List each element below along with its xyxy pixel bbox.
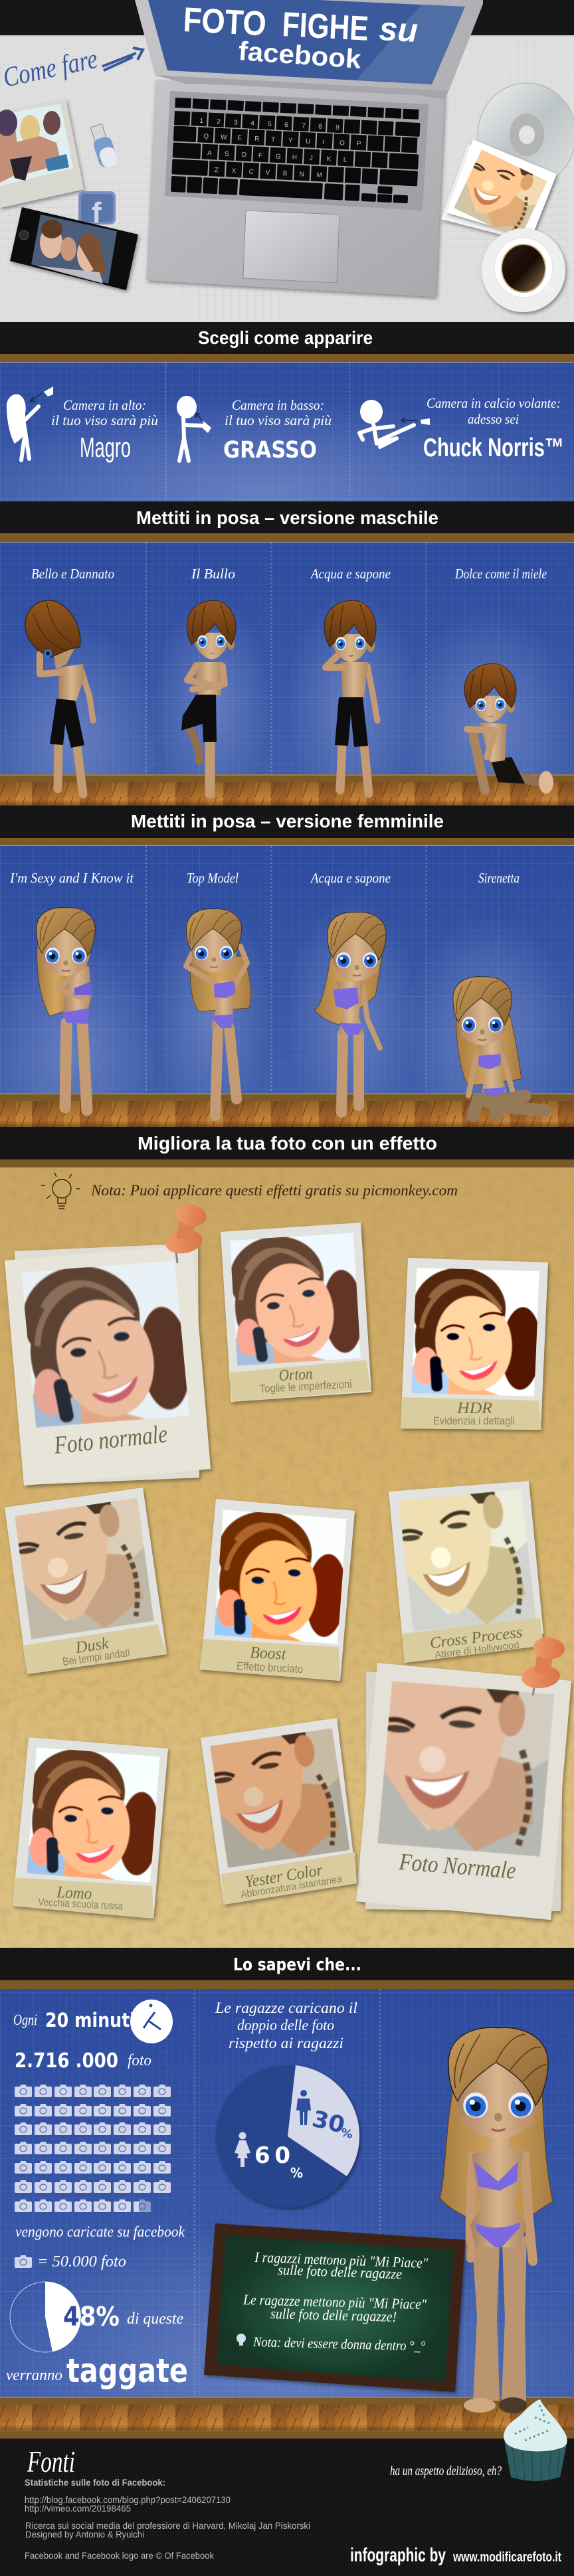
polaroid: foto normale woman: Foto normale — [52, 1420, 169, 1460]
panel: male poses — [0, 543, 574, 850]
polaroid: hdr: Evidenzia i dettagli — [433, 1415, 515, 1427]
title: FOTO — [182, 1, 267, 44]
label: il bullo: Il Bullo — [191, 566, 235, 582]
text: board lines: sulle foto delle ragazze! — [270, 2305, 397, 2325]
chart: 48 percent tagged pie: 48% — [63, 2302, 120, 2332]
icon: cupcake — [504, 2399, 567, 2482]
text: camera in basso: GRASSO — [223, 437, 317, 464]
heading: fonti: Fonti — [27, 2445, 75, 2478]
section heading: migliora la tua foto — [0, 1127, 574, 1167]
section heading: scegli come apparire — [0, 322, 574, 363]
icon: smartphone — [10, 207, 138, 290]
floor — [0, 2397, 574, 2439]
text: sources: http://vimeo.com/20198465 — [25, 2503, 131, 2514]
icon: facebook doodle: f — [92, 197, 102, 229]
panel: header desk — [0, 0, 574, 322]
polaroid: dusk: Dusk — [74, 1634, 110, 1657]
label: bello e dannato: Bello e Dannato — [31, 566, 114, 582]
figure: big girl — [440, 2027, 553, 2401]
text: ragazze doppio — [215, 2000, 357, 2051]
chart: 48 percent tagged pie: di queste — [127, 2310, 183, 2328]
polaroid: hdr: HDR — [456, 1400, 492, 1417]
text: board lines — [242, 2249, 429, 2354]
text: 2.716.000 foto: 2.716 .000 — [15, 2049, 118, 2073]
section heading: versione femminile: Mettiti in posa – versione femminile — [131, 811, 444, 831]
label: come fare: Come fare — [1, 44, 100, 94]
keyboard: ASDFGHJKL — [207, 149, 347, 164]
polaroid: boost: Boost — [250, 1644, 287, 1664]
label: 60 percent: % — [290, 2165, 303, 2181]
figure: girl i'm sexy — [37, 908, 95, 1110]
section heading: versione femminile — [0, 806, 574, 846]
title: FIGHE — [281, 5, 369, 48]
text: camera in alto: Camera in alto: — [63, 397, 146, 413]
text: camera in alto: Magro — [80, 432, 131, 463]
text: ogni 20 minuti: 20 minuti — [45, 2009, 136, 2031]
title: su — [378, 10, 419, 49]
icon: male — [296, 2090, 311, 2125]
icon: boy low camera — [177, 396, 211, 461]
credit: infographic by — [350, 2545, 561, 2566]
text: camera in calcio volante: Camera in calcio volante: — [427, 395, 561, 411]
figure: girl top model — [186, 909, 251, 1116]
text: camera in calcio volante: adesso sei — [468, 411, 519, 427]
label: dolce come il miele: Dolce come il miele — [454, 566, 547, 582]
figure: girl sirenetta — [453, 977, 545, 1116]
credit: infographic by: infographic by — [350, 2545, 446, 2566]
text: sources: Designed by Antonio & Ryuichi — [25, 2529, 144, 2539]
label: 30 percent: 30 — [310, 2106, 347, 2139]
text: camera in alto — [51, 397, 158, 463]
keyboard: ZXCVBNM — [214, 167, 322, 179]
photo: man stack — [441, 139, 557, 241]
floor — [0, 1093, 574, 1127]
icon: push pin — [163, 1202, 208, 1263]
polaroid: foto normale man — [356, 1663, 571, 1920]
icon: facebook doodle — [78, 191, 116, 229]
chart: cameras pictogram — [15, 2085, 171, 2212]
keyboard — [171, 102, 421, 204]
polaroid: orton: Toglie le imperfezioni — [259, 1378, 352, 1395]
text: verranno taggate — [6, 2352, 188, 2390]
label: i'm sexy and i know it: I'm Sexy and I Know it — [9, 870, 134, 886]
polaroid: lomo: Vecchia scuola russa — [38, 1897, 124, 1913]
label: 30 percent: % — [339, 2126, 354, 2142]
legend: camera equals 50000: = 50.000 foto — [37, 2253, 126, 2271]
chart: 48 percent tagged pie: 48% — [63, 2302, 120, 2332]
chart: 48 percent tagged pie — [10, 2282, 183, 2352]
text: ogni 20 minuti — [13, 2009, 136, 2031]
polaroid: lomo: Lomo — [56, 1883, 92, 1903]
polaroid: lomo — [13, 1737, 168, 1919]
figure: big girl feet — [464, 2397, 527, 2413]
polaroid: dusk — [5, 1488, 167, 1674]
chart: gender pie — [216, 2065, 359, 2207]
keyboard: 123456789 — [199, 118, 339, 131]
text: board lines: Le ragazze mettono più "Mi Piace" — [242, 2291, 427, 2312]
text: ragazze doppio: Le ragazze caricano il — [215, 2000, 357, 2016]
section heading: migliora la tua foto: Migliora la tua foto con un effetto — [138, 1133, 437, 1154]
label: 60 percent — [254, 2142, 303, 2181]
figure: boy bello e dannato — [25, 600, 93, 794]
icon: light bulb — [41, 1173, 80, 1209]
text: vengono caricate: vengono caricate su facebook — [15, 2223, 185, 2240]
arrow: come fare — [102, 48, 143, 70]
polaroid: cross process: Attore di Hollywood — [434, 1639, 520, 1661]
photo: friends — [0, 99, 84, 208]
polaroid: yester color: Abbronzatura istantanea — [240, 1873, 343, 1901]
icon: clock — [130, 2000, 173, 2043]
text: ogni 20 minuti: Ogni — [13, 2012, 37, 2028]
polaroid: orton — [221, 1223, 371, 1402]
text: camera in alto: il tuo viso sarà più — [51, 412, 158, 428]
title — [182, 1, 419, 74]
polaroid: cross process — [389, 1481, 543, 1663]
section heading: lo sapevi che — [0, 1948, 574, 1989]
polaroid: boost — [199, 1499, 355, 1681]
note: picmonkey: Nota: Puoi applicare questi effetti gratis su picmonkey.com — [90, 1182, 458, 1199]
text: board lines: I ragazzi mettono più "Mi Piace" — [254, 2249, 429, 2271]
text: verranno taggate: verranno — [6, 2367, 62, 2384]
floor — [0, 774, 574, 806]
polaroid: yester color — [201, 1718, 357, 1905]
figure: girl acqua e sapone — [314, 912, 386, 1112]
text: 2.716.000 foto: foto — [128, 2052, 151, 2069]
icon: small bulb — [237, 2334, 246, 2346]
section heading: versione maschile: Mettiti in posa – versione maschile — [136, 507, 438, 528]
polaroid: cross process: Cross Process — [429, 1624, 524, 1652]
panel: angle of the camera — [0, 363, 574, 584]
panel: female poses — [0, 846, 574, 1162]
panel: stats — [0, 1989, 574, 2439]
text: ragazze doppio: doppio delle foto — [237, 2017, 334, 2033]
label: top model: Top Model — [187, 870, 239, 886]
polaroid: orton: Orton — [278, 1365, 313, 1385]
section heading: versione maschile — [0, 501, 574, 543]
text: sources: http://blog.facebook.com/blog.php?post=2406207130 — [25, 2494, 231, 2505]
figure: boy acqua e sapone — [324, 600, 377, 794]
text: sources: Facebook and Facebook logo are © Of Facebook — [25, 2550, 215, 2561]
text: ragazze doppio: rispetto ai ragazzi — [229, 2035, 343, 2051]
figure: boy il bullo — [181, 600, 236, 794]
text: sources: Statistiche sulle foto di Facebook: — [25, 2477, 165, 2488]
keyboard: QWERTYUIOP — [203, 133, 361, 148]
text: camera in basso: Camera in basso: — [232, 397, 324, 413]
section heading: lo sapevi che: Lo sapevi che... — [233, 1955, 361, 1975]
polaroid: hdr — [401, 1258, 548, 1430]
label: sirenetta: Sirenetta — [478, 870, 520, 886]
icon: usb stick — [88, 123, 119, 170]
label: 60 percent: 60 — [254, 2142, 294, 2169]
polaroid: yester color: Yester Color — [244, 1861, 324, 1891]
text: aspetto delizioso: ha un aspetto delizioso, eh? — [390, 2464, 502, 2478]
icon: laptop — [135, 0, 483, 297]
icon: coffee cup — [482, 228, 565, 312]
label: acqua e sapone: Acqua e sapone — [310, 870, 391, 886]
icon: girl high camera — [7, 386, 53, 460]
text: board lines: sulle foto delle ragazze — [278, 2261, 403, 2282]
icon: push pin — [521, 1636, 565, 1695]
title: facebook — [237, 37, 363, 74]
text: board lines: Nota: devi essere donna dentro °_° — [252, 2334, 426, 2354]
icon: cd — [478, 83, 574, 187]
text: camera in calcio volante — [423, 395, 564, 462]
text: sources — [25, 2477, 310, 2561]
text: camera in basso: il tuo viso sarà più — [225, 412, 332, 428]
icon: female — [235, 2132, 250, 2167]
text: camera in basso — [223, 397, 332, 464]
section heading: scegli come apparire: Scegli come apparire — [198, 327, 373, 348]
icon: flying kick — [359, 400, 430, 447]
polaroid: foto normale man: Foto Normale — [398, 1848, 517, 1884]
panel: cork board with effects — [0, 1167, 574, 1948]
polaroid: dusk: Bei tempi andati — [62, 1646, 131, 1668]
panel: footer — [0, 2399, 574, 2576]
screen — [148, 0, 465, 84]
label: acqua e sapone: Acqua e sapone — [310, 566, 391, 582]
panel: blackboard — [204, 2223, 465, 2392]
text: sources: Ricerca sui social media del professiore di Harvard, Mikolaj Jan Piskorski — [25, 2520, 310, 2531]
polaroid: foto normale woman — [5, 1243, 211, 1486]
polaroid: boost: Effetto bruciato — [237, 1660, 304, 1675]
figure: boy dolce come il miele — [464, 663, 553, 794]
text: verranno taggate: taggate — [66, 2352, 188, 2390]
